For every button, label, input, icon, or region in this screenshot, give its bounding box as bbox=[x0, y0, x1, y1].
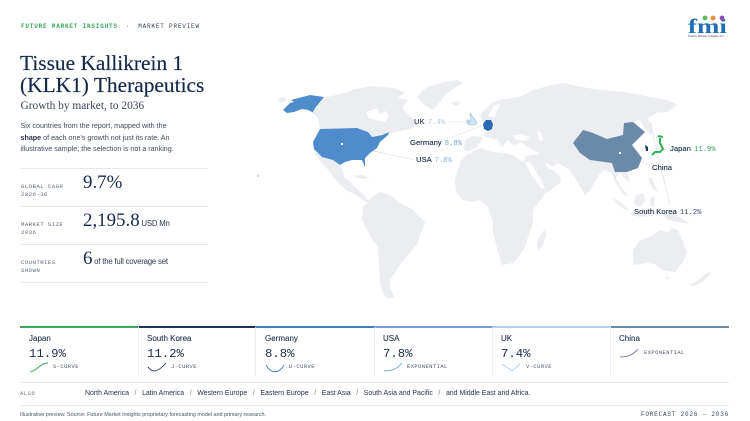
stat: countries shown: 6 of the full coverage set bbox=[83, 248, 168, 269]
stat: market size bbox=[21, 210, 170, 236]
map label: Japan: Japan 11.9% bbox=[670, 144, 716, 154]
intro text: Six countries from the report, mapped with the bbox=[20, 122, 167, 130]
subtitle: Growth by market, to 2036 bbox=[20, 100, 144, 112]
stat: market size: 2,195.8 USD Mn bbox=[83, 210, 170, 231]
footer source: Illustrative preview. Source: Future Market Insights proprietary forecasting model and primary research. bbox=[20, 412, 266, 418]
card: South Korea bbox=[139, 326, 256, 376]
country: South Korea bbox=[645, 145, 648, 151]
card: South Korea: 11.2% bbox=[147, 347, 184, 361]
map label: South Korea: South Korea 11.2% bbox=[634, 207, 701, 217]
stat: countries shown bbox=[21, 248, 168, 274]
map label: USA: USA 7.8% bbox=[416, 155, 452, 165]
logo wordmark: fmi bbox=[688, 14, 727, 38]
stat: global CAGR: 2026-36 bbox=[21, 191, 48, 198]
intro text bbox=[20, 122, 174, 153]
connector lines bbox=[342, 122, 670, 205]
title: Tissue Kallikrein 1 bbox=[20, 51, 183, 75]
card: UK: 7.4% bbox=[501, 347, 531, 361]
card: Germany: Germany bbox=[265, 334, 298, 343]
stat: global CAGR bbox=[21, 172, 122, 198]
also list: North America / Latin America / Western Europe / Eastern Europe / East Asia / South Asia and Pacific / and Middle East and Africa. bbox=[85, 390, 530, 397]
map label: Germany: Germany 8.8% bbox=[410, 138, 462, 148]
country: Japan bbox=[652, 136, 663, 155]
stat: market size: 2036 bbox=[21, 229, 36, 236]
header eyebrow: FUTURE MARKET INSIGHTS · MARKET PREVIEW bbox=[21, 23, 200, 30]
logo bbox=[688, 14, 727, 38]
map label: UK: UK 7.4% bbox=[414, 117, 445, 127]
card: China: EXPONENTIAL bbox=[644, 350, 685, 356]
stat: market size: MARKET SIZE bbox=[21, 221, 63, 228]
stat: countries shown: COUNTRIES bbox=[21, 259, 56, 266]
card: South Korea: J-CURVE bbox=[171, 364, 197, 370]
map label: China: China bbox=[652, 163, 672, 172]
stat: global CAGR: GLOBAL CAGR bbox=[21, 183, 63, 190]
inland seas bbox=[488, 104, 556, 188]
base land masses bbox=[277, 80, 710, 298]
card: Germany bbox=[256, 326, 375, 376]
stray island dot bbox=[257, 175, 259, 177]
stat: countries shown: SHOWN bbox=[21, 267, 40, 274]
title bbox=[20, 51, 204, 97]
also label: ALSO bbox=[20, 391, 35, 397]
stats block bbox=[20, 168, 208, 283]
card: USA bbox=[375, 326, 493, 376]
logo caption: Future Market Insights Inc. bbox=[688, 34, 725, 38]
card: USA: EXPONENTIAL bbox=[407, 364, 448, 370]
intro text: shape of each one's growth not just its rate. An bbox=[20, 134, 170, 142]
card: Germany: 8.8% bbox=[265, 347, 295, 361]
card: USA: USA bbox=[383, 334, 399, 343]
country: China bbox=[573, 122, 645, 172]
logo dots bbox=[702, 16, 724, 20]
country: Germany bbox=[483, 120, 493, 131]
card: Japan: 11.9% bbox=[29, 347, 66, 361]
stat: global CAGR: 9.7% bbox=[83, 172, 122, 193]
country: USA bbox=[283, 95, 389, 167]
card: UK: V-CURVE bbox=[526, 364, 552, 370]
card: China bbox=[611, 326, 729, 376]
card: China: China bbox=[619, 334, 640, 343]
title: (KLK1) Therapeutics bbox=[20, 73, 204, 97]
card: Japan: Japan bbox=[29, 334, 51, 343]
footer forecast: FORECAST 2026 – 2036 bbox=[641, 411, 729, 418]
card: Japan bbox=[20, 326, 139, 376]
card: Japan: S-CURVE bbox=[53, 364, 79, 370]
card: USA: 7.8% bbox=[383, 347, 413, 361]
card: Germany: U-CURVE bbox=[289, 364, 315, 370]
card: UK bbox=[493, 326, 611, 376]
country: UK bbox=[467, 113, 477, 125]
card: UK: UK bbox=[501, 334, 512, 343]
intro text: illustrative sample; the selection is not a ranking. bbox=[20, 145, 174, 153]
card: South Korea: South Korea bbox=[147, 334, 191, 343]
